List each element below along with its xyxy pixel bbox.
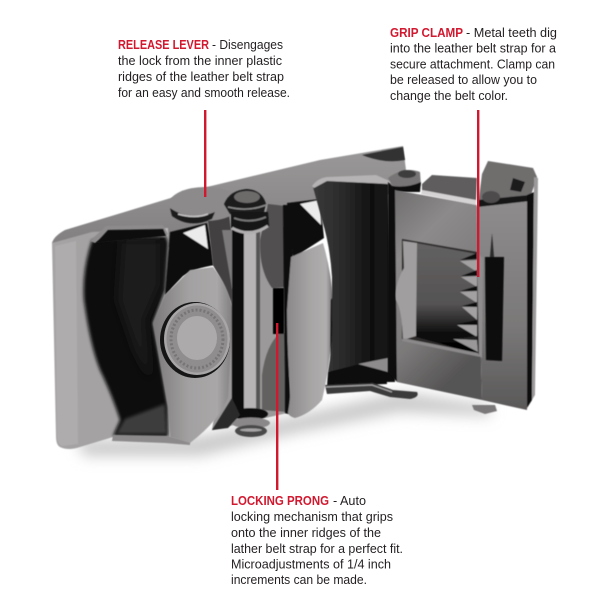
left wing plate [52,228,172,449]
left dark leather [84,225,190,445]
rivet disc [160,302,230,378]
callout: release lever: for an easy and smooth release. [118,86,290,100]
right leather panel [312,175,418,399]
arrow: grip clamp pointer [477,110,479,277]
callout: locking prong: locking mechanism that grips [231,510,393,524]
buckle illustration [52,146,538,449]
callout: locking prong: lather belt strap for a perfect fit. [231,542,403,556]
arrow: release lever pointer [204,110,206,197]
callout: grip clamp: secure attachment. Clamp can [390,58,555,72]
clamp window and teeth [396,233,504,361]
arrow: locking prong pointer [276,323,278,490]
back plate [52,146,407,262]
callout: locking prong: onto the inner ridges of the [231,526,381,540]
release lever [169,187,241,223]
upper dark wedge with highlight [165,223,215,295]
callout: locking prong [231,494,403,587]
prong [212,189,270,437]
center right plate [283,199,333,418]
grip clamp [388,161,538,414]
callout: locking prong: LOCKING PRONG [231,494,329,508]
callout: locking prong: increments can be made. [231,573,367,587]
center left plate [153,267,233,443]
callout: grip clamp: be released to allow you to [390,73,537,87]
callout: grip clamp [390,26,557,103]
area behind prong [207,205,292,430]
callout: release lever: ridges of the leather belt strap [118,70,284,84]
callout: grip clamp: into the leather belt strap for a [390,42,556,56]
drop shadow under buckle [75,392,490,456]
callout: release lever [118,38,290,100]
leather pieces beside prong [260,204,288,412]
callout: release lever: RELEASE LEVER [118,38,209,52]
callout: locking prong: - Auto [333,494,366,508]
hinge rivet [388,170,421,192]
callout: grip clamp: change the belt color. [390,89,508,103]
callout: locking prong: Microadjustments of 1/4 inch [231,558,391,572]
callout: release lever: the lock from the inner plastic [118,54,282,68]
callout: release lever: - Disengages [212,38,283,52]
callout: grip clamp: - Metal teeth dig [466,26,557,40]
callout: grip clamp: GRIP CLAMP [390,26,463,40]
